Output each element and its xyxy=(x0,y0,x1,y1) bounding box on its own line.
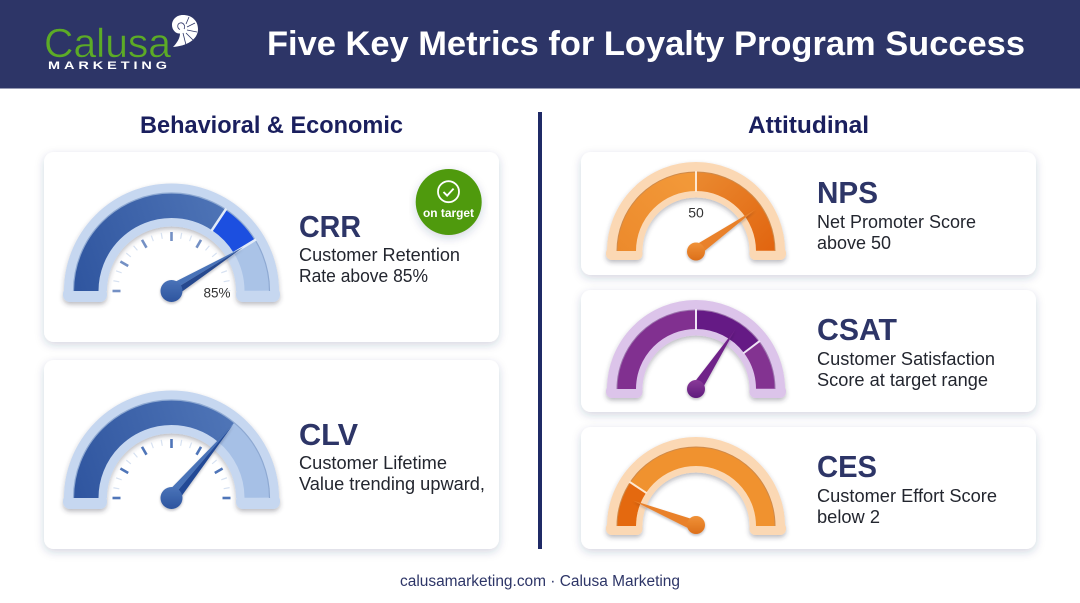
gauge: CLV xyxy=(63,400,280,509)
card: CRR xyxy=(44,152,499,342)
title: Five Key Metrics for Loyalty Program Success xyxy=(267,25,1025,63)
value label: 85%: 85% xyxy=(203,286,231,300)
description: CES: Customer Effort Score xyxy=(817,485,997,506)
logo wordmark: Calusa xyxy=(44,20,171,66)
needle xyxy=(160,242,246,302)
badge: on target xyxy=(416,169,482,235)
metric name: CES: CES xyxy=(817,449,877,484)
panel: CLV xyxy=(44,360,499,549)
needle xyxy=(160,420,238,509)
panel: CES xyxy=(581,427,1036,549)
metric name: CRR: CRR xyxy=(299,209,361,244)
gauge: CES xyxy=(606,447,786,535)
card: NPS xyxy=(581,152,1036,275)
description: CLV: Customer Lifetime xyxy=(299,452,447,473)
card: CES xyxy=(581,427,1036,549)
needle xyxy=(687,326,740,398)
header band xyxy=(0,0,1080,88)
metric name: CSAT: CSAT xyxy=(817,312,897,347)
panel: NPS xyxy=(581,152,1036,275)
panel: CSAT xyxy=(581,290,1036,412)
logo xyxy=(44,15,198,72)
description: CES: below 2 xyxy=(817,506,880,527)
badge: on target: on target xyxy=(423,208,474,220)
metric name: NPS: NPS xyxy=(817,175,878,210)
gauge: NPS xyxy=(606,171,786,260)
needle xyxy=(631,496,705,534)
gauge: CSAT xyxy=(606,309,786,398)
description: NPS: above 50 xyxy=(817,232,891,253)
heading: attitudinal: Attitudinal xyxy=(748,112,869,139)
panel: CRR xyxy=(44,152,499,342)
description: CRR: Rate above 85% xyxy=(299,265,428,286)
logo subtitle: MARKETING xyxy=(48,60,171,72)
card: CLV xyxy=(44,360,499,549)
description: NPS: Net Promoter Score xyxy=(817,211,976,232)
description: CSAT: Score at target range xyxy=(817,369,988,390)
heading: behavioral and economic: Behavioral & Economic xyxy=(140,112,403,139)
description: CSAT: Customer Satisfaction xyxy=(817,348,995,369)
card: CSAT xyxy=(581,290,1036,412)
metric name: CLV: CLV xyxy=(299,417,358,452)
description: CRR: Customer Retention xyxy=(299,244,460,265)
footer: calusamarketing.com · Calusa Marketing xyxy=(400,573,680,590)
gauge: CRR xyxy=(63,193,280,302)
needle xyxy=(687,205,759,260)
description: CLV: Value trending upward, xyxy=(299,473,485,494)
logo shell icon xyxy=(172,15,198,47)
value label: 50: 50 xyxy=(688,204,704,220)
